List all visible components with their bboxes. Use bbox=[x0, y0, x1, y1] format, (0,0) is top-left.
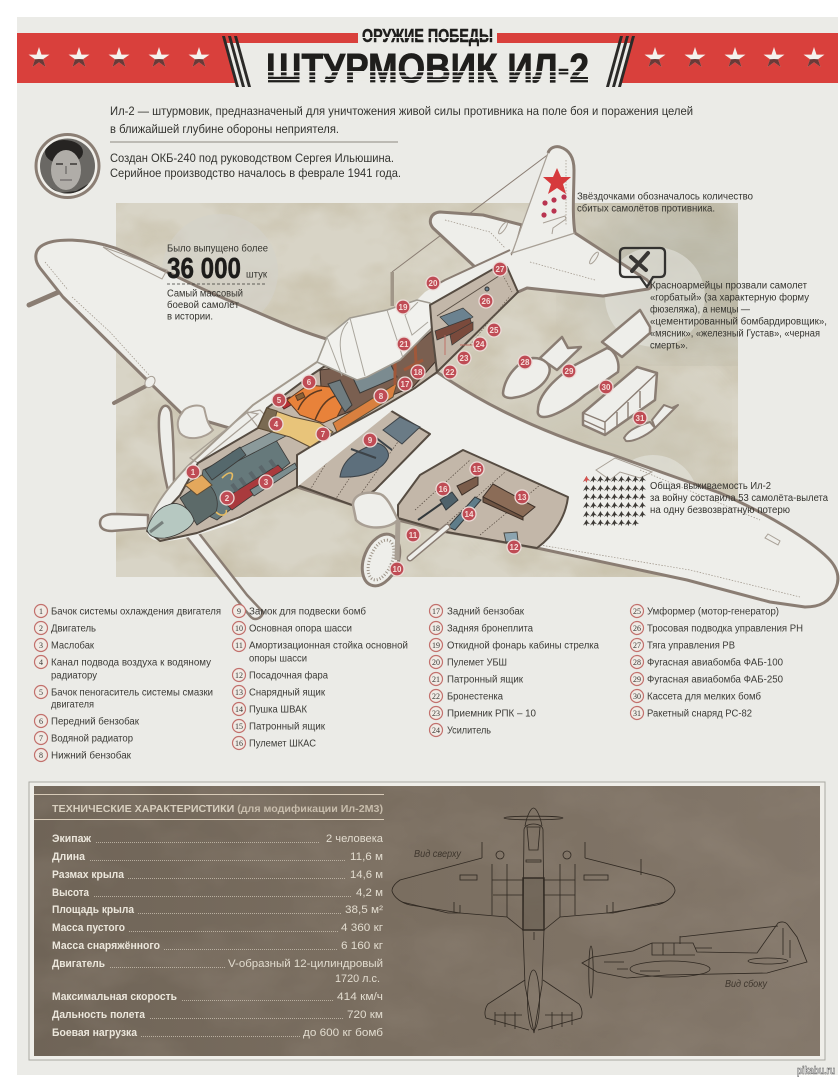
callout: nicknames: смерть». bbox=[650, 340, 688, 352]
legend column 3: Задняя бронеплита bbox=[447, 622, 533, 634]
far wing bbox=[36, 240, 340, 440]
callout: nicknames: «мясник», «железный Густав», «черная bbox=[650, 328, 820, 340]
legend column 2: Посадочная фара bbox=[249, 670, 328, 682]
radio and converter boxes bbox=[435, 308, 473, 345]
specs rows: 11,6 м bbox=[350, 851, 383, 863]
legend column 1: радиатору bbox=[51, 670, 97, 682]
numbered markers on illustration: 3 bbox=[264, 478, 269, 487]
cutaway plane illustration bbox=[29, 147, 838, 619]
icon grid: planes per sortie bbox=[583, 476, 646, 526]
callout: nicknames bbox=[650, 280, 827, 352]
legend column 4: Умформер (мотор-генератор) bbox=[647, 606, 779, 618]
lower fuel tank band bbox=[320, 330, 437, 422]
legend column 3: 17 bbox=[432, 607, 440, 616]
legend column 3: Бронестенка bbox=[447, 692, 503, 702]
banner: red left band bbox=[17, 33, 358, 83]
legend column 2: 16 bbox=[235, 739, 243, 748]
legend column 3: 21 bbox=[432, 675, 440, 684]
legend column 4: Ракетный снаряд РС-82 bbox=[647, 708, 752, 720]
legend column 1: 6 bbox=[39, 717, 43, 726]
legend column 3: 19 bbox=[432, 641, 440, 650]
legend column 1: Двигатель bbox=[51, 624, 96, 634]
legend column 2: опоры шасси bbox=[249, 654, 307, 664]
legend column 1: двигателя bbox=[51, 700, 94, 710]
specs rows: 6 160 кг bbox=[341, 940, 383, 952]
callout: production count: 36 000 bbox=[167, 253, 241, 285]
numbered markers on illustration: 27 bbox=[496, 265, 505, 274]
legend column 4: 26 bbox=[633, 624, 641, 633]
legend column 2: Пушка ШВАК bbox=[249, 704, 307, 716]
intro text bbox=[110, 104, 693, 136]
legend column 2: Пулемет ШКАС bbox=[249, 738, 316, 750]
legend column 4 bbox=[630, 604, 803, 720]
numbered markers on illustration: 29 bbox=[565, 367, 574, 376]
legend column 1: 2 bbox=[39, 624, 43, 633]
numbered markers on illustration: 24 bbox=[476, 340, 485, 349]
kicker: Оружие победы: ОРУЖИЕ ПОБЕДЫ bbox=[362, 26, 493, 46]
title banner bbox=[17, 26, 838, 91]
callout: survivability: за войну составила 53 самолёта-вылета bbox=[650, 493, 828, 504]
coolant pipe bbox=[216, 473, 232, 515]
specs rows: Двигатель bbox=[52, 958, 105, 970]
legend column 4: 31 bbox=[633, 709, 641, 718]
designer text: Создан ОКБ-240 под руководством Сергея Ильюшина. bbox=[110, 151, 394, 165]
banner: right slanted stripes bbox=[606, 36, 635, 87]
legend column 4: 27 bbox=[633, 641, 641, 650]
legend column 2: Снарядный ящик bbox=[249, 688, 326, 698]
legend column 3: 18 bbox=[432, 624, 440, 633]
foam tank bbox=[279, 397, 291, 409]
callout: production count: боевой самолёт bbox=[167, 299, 239, 311]
numbered markers on illustration: 23 bbox=[460, 354, 469, 363]
numbered markers on illustration: 19 bbox=[399, 303, 408, 312]
legend column 2: Патронный ящик bbox=[249, 722, 326, 732]
icon: speech bubble with plane bbox=[620, 248, 665, 287]
red star on tail bbox=[543, 168, 571, 194]
numbered markers on illustration: 28 bbox=[521, 358, 530, 367]
bomb FAB-250 bbox=[538, 310, 650, 417]
canopy bbox=[317, 300, 435, 380]
legend column 3: Усилитель bbox=[447, 726, 491, 736]
legend column 3: Патронный ящик bbox=[447, 674, 524, 686]
legend column 2: 15 bbox=[235, 722, 243, 731]
numbered markers on illustration: 13 bbox=[518, 493, 527, 502]
legend column 1: 3 bbox=[39, 641, 43, 650]
legend column 4: Тросовая подводка управления РН bbox=[647, 624, 803, 634]
cabin armor plates bbox=[395, 345, 423, 385]
numbered markers on illustration: 30 bbox=[602, 383, 611, 392]
near wing bbox=[297, 372, 838, 607]
numbered markers on illustration: 22 bbox=[446, 368, 455, 377]
small bomb cassette bbox=[583, 367, 657, 435]
legend column 2: 14 bbox=[235, 705, 243, 714]
legend column 4: 25 bbox=[633, 607, 641, 616]
banner: left stars bbox=[28, 47, 210, 67]
legend column 1: 8 bbox=[39, 751, 43, 760]
numbered markers on illustration: 7 bbox=[321, 430, 326, 439]
label: side view: Вид сбоку bbox=[725, 978, 768, 990]
numbered markers on illustration: 21 bbox=[400, 340, 409, 349]
banner: left slanted stripes bbox=[222, 36, 251, 87]
specs rows: V-образный 12-цилиндровый bbox=[228, 958, 383, 970]
antenna wire bbox=[392, 147, 558, 272]
wing gun bay cutaway bbox=[398, 450, 568, 548]
specs rows: Высота bbox=[52, 887, 90, 899]
windscreen strip bbox=[190, 410, 265, 463]
numbered markers on illustration: 4 bbox=[274, 420, 279, 429]
machine gun bbox=[418, 492, 458, 520]
numbered markers on illustration: 2 bbox=[225, 494, 230, 503]
callout: nicknames: фюзеляжа), а немцы — bbox=[650, 304, 750, 316]
landing light bbox=[504, 532, 518, 542]
wing bomb bay cutaway bbox=[297, 406, 430, 505]
callout: nicknames: «горбатый» (за характерную форму bbox=[650, 292, 809, 304]
legend column 3: 23 bbox=[432, 709, 440, 718]
legend column 2 bbox=[232, 604, 408, 750]
callout: nicknames: Красноармейцы прозвали самолет bbox=[650, 280, 807, 292]
panel: technical specifications bbox=[29, 782, 825, 1060]
main title: ШТУРМОВИК ИЛ-2 bbox=[266, 45, 589, 91]
legend column 2: 11 bbox=[235, 641, 243, 650]
specs rows: Экипаж bbox=[52, 833, 91, 845]
numbered markers on illustration: 12 bbox=[510, 543, 519, 552]
specs rows: 4 360 кг bbox=[341, 922, 383, 934]
blueprint: top view bbox=[392, 808, 675, 1033]
numbered markers on illustration: 17 bbox=[401, 380, 410, 389]
specs rows: Длина bbox=[52, 851, 86, 863]
armored frame bbox=[328, 380, 352, 412]
specs rows: Масса снаряжённого bbox=[52, 940, 160, 952]
fuselage bbox=[147, 250, 518, 541]
legend column 2: Амортизационная стойка основной bbox=[249, 640, 408, 652]
blueprint: side view bbox=[582, 922, 807, 998]
callout: survivability: на одну безвозвратную потерю bbox=[650, 504, 790, 516]
legend column 3: 22 bbox=[432, 692, 440, 701]
legend column 4: Тяга управления РВ bbox=[647, 640, 735, 652]
propeller hub bbox=[147, 482, 217, 538]
numbered markers on illustration: 9 bbox=[368, 436, 373, 445]
numbered markers on illustration: 6 bbox=[307, 378, 312, 387]
designer text: Серийное производство началось в феврале 1941 года. bbox=[110, 166, 401, 180]
numbered markers on illustration: 11 bbox=[409, 531, 418, 540]
legend column 3: Задний бензобак bbox=[447, 606, 525, 618]
air duct and radiator bbox=[258, 408, 333, 447]
legend column 1 bbox=[34, 604, 221, 762]
propeller bbox=[100, 406, 263, 619]
tail fin and stabilizers bbox=[430, 147, 651, 296]
legend column 4: Кассета для мелких бомб bbox=[647, 690, 761, 702]
callout: nicknames: «цементированный бомбардировщик», bbox=[650, 316, 827, 328]
banner: right stars bbox=[644, 47, 824, 67]
legend column 1: Водяной радиатор bbox=[51, 734, 133, 744]
banner: red right band bbox=[497, 33, 838, 83]
legend column 4: 29 bbox=[633, 675, 641, 684]
legend column 1: 7 bbox=[39, 734, 43, 743]
legend column 1: 5 bbox=[39, 688, 43, 697]
specs rows: Боевая нагрузка bbox=[52, 1027, 138, 1039]
translucent highlight circles bbox=[162, 214, 705, 545]
bomb FAB-100 bbox=[503, 337, 581, 398]
numbered markers on illustration: 10 bbox=[393, 565, 402, 574]
legend column 4: 30 bbox=[633, 692, 641, 701]
intro text: Ил-2 — штурмовик, предназначеный для уничтожения живой силы противника на поле боя и поражения целей bbox=[110, 104, 693, 118]
front fuel tank bbox=[287, 385, 343, 423]
legend column 3: Приемник РПК – 10 bbox=[447, 708, 536, 720]
callout: production count: Было выпущено более bbox=[167, 242, 268, 254]
numbered markers on illustration: 5 bbox=[277, 396, 282, 405]
specs rows: до 600 кг бомб bbox=[303, 1027, 383, 1039]
legend column 4: Фугасная авиабомба ФАБ-250 bbox=[647, 674, 783, 686]
legend column 1: 4 bbox=[39, 658, 43, 667]
textured map background bbox=[116, 203, 738, 577]
numbered markers on illustration: 20 bbox=[429, 279, 438, 288]
numbered markers on illustration: 14 bbox=[465, 510, 474, 519]
legend column 1: Маслобак bbox=[51, 640, 95, 652]
main landing gear bbox=[353, 493, 447, 591]
specs rows bbox=[52, 833, 384, 1039]
bomb in wing bay bbox=[340, 417, 420, 477]
specs rows: 2 человека bbox=[326, 833, 384, 845]
specs rows: Площадь крыла bbox=[52, 904, 135, 916]
callout: production count bbox=[167, 242, 268, 322]
specs rows: 720 км bbox=[347, 1009, 383, 1021]
legend column 2: Замок для подвески бомб bbox=[249, 606, 366, 618]
kill stars on tail bbox=[541, 194, 567, 218]
legend column 4: Фугасная авиабомба ФАБ-100 bbox=[647, 656, 783, 668]
numbered markers on illustration: 16 bbox=[439, 485, 448, 494]
numbered markers on illustration: 25 bbox=[490, 326, 499, 335]
specs header: ТЕХНИЧЕСКИЕ ХАРАКТЕРИСТИКИ (для модификации Ил-2М3) bbox=[52, 803, 383, 815]
callout: survivability bbox=[650, 480, 828, 516]
ammo box, short bbox=[457, 476, 478, 495]
left wing gun barrels bbox=[29, 288, 148, 403]
cannon bbox=[448, 497, 481, 530]
legend column 3: Пулемет УБШ bbox=[447, 658, 507, 668]
numbered markers on illustration: 8 bbox=[379, 392, 384, 401]
legend column 1: Нижний бензобак bbox=[51, 750, 132, 762]
radio mast bbox=[390, 272, 394, 306]
designer text bbox=[110, 151, 401, 180]
rocket RS-82 bbox=[624, 405, 678, 441]
legend column 1: Передний бензобак bbox=[51, 716, 140, 728]
specs rows: 14,6 м bbox=[350, 869, 383, 881]
portrait of Ilyushin bbox=[34, 133, 100, 199]
legend column 2: 12 bbox=[235, 671, 243, 680]
coolant tank bbox=[185, 475, 212, 495]
legend column 1: Канал подвода воздуха к водяному bbox=[51, 658, 211, 668]
engine block bbox=[197, 427, 297, 520]
legend column 2: 13 bbox=[235, 688, 243, 697]
intro text: в ближайшей глубине обороны неприятеля. bbox=[110, 122, 339, 136]
callout: production count: в истории. bbox=[167, 312, 213, 322]
numbered markers on illustration: 31 bbox=[636, 414, 645, 423]
specs rows: 4,2 м bbox=[356, 887, 383, 899]
numbered markers on illustration: 1 bbox=[191, 468, 196, 477]
legend column 2: 10 bbox=[235, 624, 243, 633]
callout: production count: Самый массовый bbox=[167, 288, 243, 300]
callout: tail stars: Звёздочками обозначалось количество bbox=[577, 190, 753, 202]
legend column 1: Бачок пеногаситель системы смазки bbox=[51, 688, 213, 698]
legend column 3: Откидной фонарь кабины стрелка bbox=[447, 640, 599, 652]
callout: survivability: Общая выживаемость Ил-2 bbox=[650, 480, 771, 492]
gunner seat structure bbox=[353, 363, 397, 393]
label: top view: Вид сверху bbox=[414, 849, 462, 860]
numbered markers on illustration bbox=[186, 262, 647, 576]
callout: tail stars: сбитых самолётов противника. bbox=[577, 202, 715, 214]
callout: tail stars bbox=[577, 190, 753, 214]
specs rows: 1720 л.с. bbox=[335, 973, 380, 985]
specs rows: 38,5 м² bbox=[345, 904, 383, 916]
legend column 2: Основная опора шасси bbox=[249, 624, 352, 634]
specs rows: 414 км/ч bbox=[337, 991, 383, 1003]
numbered markers on illustration: 26 bbox=[482, 297, 491, 306]
legend column 2: 9 bbox=[237, 607, 241, 616]
numbered markers on illustration: 18 bbox=[414, 368, 423, 377]
legend column 3: 24 bbox=[432, 726, 440, 735]
legend column 1: Бачок системы охлаждения двигателя bbox=[51, 606, 221, 618]
callout: production count: штук bbox=[246, 270, 268, 280]
specs rows: Максимальная скорость bbox=[52, 991, 177, 1003]
legend column 1: 1 bbox=[39, 607, 43, 616]
forward fuselage cutaway bbox=[147, 328, 437, 541]
legend column 3 bbox=[430, 604, 599, 736]
legend column 4: 28 bbox=[633, 658, 641, 667]
numbered markers on illustration: 15 bbox=[473, 465, 482, 474]
specs rows: Масса пустого bbox=[52, 922, 125, 934]
ammo box, long bbox=[483, 484, 535, 517]
specs rows: Дальность полета bbox=[52, 1009, 146, 1021]
specs rows: Размах крыла bbox=[52, 869, 125, 881]
rear fuselage cutaway bbox=[430, 267, 518, 372]
legend column 3: 20 bbox=[432, 658, 440, 667]
